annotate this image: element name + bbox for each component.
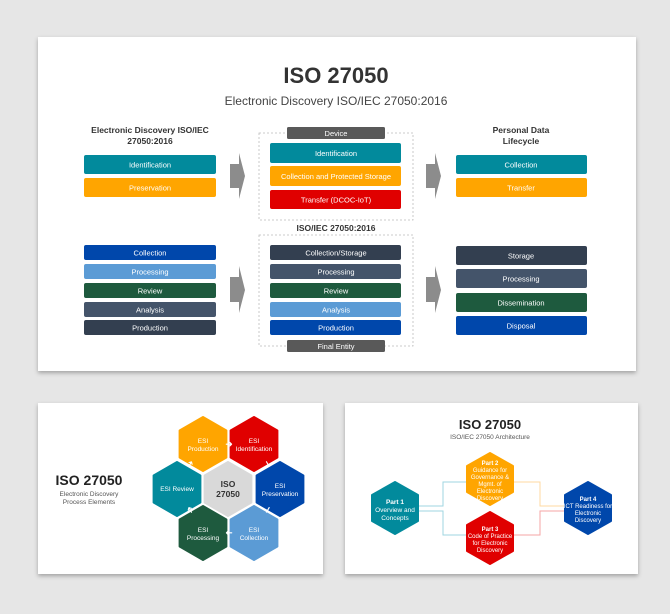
center top dashed group: Transfer (DCOC-IoT) bbox=[301, 196, 372, 204]
cycle arrows: ➜ bbox=[262, 504, 274, 516]
left bottom boxes: Processing bbox=[131, 268, 169, 276]
right bottom boxes: Dissemination bbox=[497, 298, 545, 308]
cycle arrows: ➜ bbox=[262, 458, 274, 470]
hexagon: part 2: Governance & bbox=[471, 475, 509, 481]
hexagon: part 3 bbox=[467, 512, 513, 564]
left bottom boxes: Analysis bbox=[136, 306, 164, 314]
connectors bbox=[418, 482, 566, 535]
left top boxes bbox=[84, 155, 216, 197]
heading: ISO 27050 bbox=[56, 472, 123, 488]
hexagon: part 2 bbox=[467, 453, 513, 505]
hexagon cluster: ISO bbox=[221, 479, 236, 489]
hexagon: part 1: Part 1 bbox=[386, 499, 404, 506]
section heading: ISO/IEC 27050:2016 bbox=[297, 223, 376, 233]
hexagon: part 3: Code of Practice bbox=[468, 534, 513, 540]
hexagon: part 3: for Electronic bbox=[472, 541, 508, 547]
title: ISO 27050 bbox=[283, 63, 389, 88]
right bottom boxes bbox=[456, 246, 587, 335]
hexagon cluster: Processing bbox=[187, 535, 219, 542]
left top boxes: Identification bbox=[129, 160, 171, 170]
subtitle: Electronic Discovery bbox=[60, 491, 119, 498]
center top dashed group: Device bbox=[325, 129, 347, 138]
hexagon: part 3: Discovery bbox=[477, 548, 503, 554]
center bottom dashed group: Collection/Storage bbox=[305, 248, 367, 258]
left heading: 27050:2016 bbox=[127, 136, 173, 146]
center top dashed group: Identification bbox=[315, 149, 357, 158]
center bottom dashed group: Processing bbox=[317, 268, 355, 276]
center bottom dashed group: Analysis bbox=[322, 306, 350, 314]
hexagon cluster: 27050 bbox=[216, 489, 240, 499]
arrow top left bbox=[230, 153, 245, 199]
arrow bottom left bbox=[230, 266, 245, 313]
right heading: Lifecycle bbox=[503, 136, 539, 146]
hexagon: part 1 bbox=[372, 482, 418, 534]
hexagon: part 2: Mgmt. of bbox=[478, 482, 502, 488]
center bottom dashed group bbox=[259, 235, 413, 352]
hexagon: part 4: Part 4 bbox=[580, 497, 597, 503]
left bottom boxes: Review bbox=[138, 286, 163, 296]
hexagon: part 4: ICT Readiness for bbox=[564, 504, 612, 510]
hexagon: part 4: Discovery bbox=[575, 518, 601, 524]
hexagon: part 1: Concepts bbox=[381, 515, 409, 522]
heading: ISO 27050 bbox=[459, 417, 521, 432]
right bottom boxes: Disposal bbox=[507, 322, 536, 330]
left bottom boxes: Collection bbox=[134, 248, 166, 258]
subtitle: ISO/IEC 27050 Architecture bbox=[450, 434, 530, 441]
panel: bottom left slide bbox=[38, 403, 323, 574]
center top dashed group: Collection and Protected Storage bbox=[281, 172, 391, 181]
hexagon cluster: ESI bbox=[275, 483, 285, 490]
hexagon cluster bbox=[154, 417, 303, 560]
left heading: Electronic Discovery ISO/IEC bbox=[91, 125, 209, 135]
hexagon: part 2: Discovery bbox=[477, 496, 503, 502]
cycle arrows: ➜ bbox=[184, 458, 196, 470]
hexagon cluster: ESI bbox=[249, 438, 259, 445]
arrow bottom right bbox=[426, 266, 441, 313]
right top boxes: Collection bbox=[505, 160, 537, 170]
center top dashed group bbox=[259, 127, 413, 220]
right bottom boxes: Processing bbox=[502, 274, 540, 284]
left bottom boxes: Production bbox=[132, 324, 168, 332]
right heading: Personal Data bbox=[493, 125, 550, 135]
cycle arrows: ➜ bbox=[184, 504, 196, 516]
left bottom boxes bbox=[84, 245, 216, 335]
center bottom dashed group: Final Entity bbox=[317, 342, 355, 351]
subtitle: Electronic Discovery ISO/IEC 27050:2016 bbox=[225, 94, 448, 108]
hexagon: part 1: Overview and bbox=[375, 507, 415, 514]
center bottom dashed group: Review bbox=[324, 286, 349, 296]
hexagon cluster: ESI bbox=[198, 527, 208, 534]
panel: top slide bbox=[38, 37, 636, 371]
hexagon cluster: Collection bbox=[240, 535, 269, 542]
cycle arrows bbox=[184, 439, 274, 538]
hexagon cluster: ESI bbox=[198, 438, 208, 445]
hexagon: part 2: Guidance for bbox=[473, 468, 507, 474]
right top boxes: Transfer bbox=[507, 184, 535, 192]
hexagon cluster: Identification bbox=[236, 446, 273, 453]
hexagon: part 2: Electronic bbox=[477, 489, 503, 495]
hexagon cluster: Preservation bbox=[262, 491, 299, 498]
hexagon: part 2: Part 2 bbox=[482, 461, 499, 467]
hexagon cluster: ESI Review bbox=[160, 486, 194, 493]
cycle arrows: ➜ bbox=[225, 439, 233, 449]
hexagon: part 4: Electronic bbox=[575, 511, 601, 517]
right bottom boxes: Storage bbox=[508, 252, 534, 260]
left top boxes: Preservation bbox=[129, 184, 171, 192]
center bottom dashed group: Production bbox=[318, 324, 354, 332]
hexagon: part 3: Part 3 bbox=[482, 527, 499, 533]
hexagon cluster: Production bbox=[187, 446, 219, 453]
hexagon: part 4 bbox=[564, 482, 612, 534]
hexagon cluster: ESI bbox=[249, 527, 259, 534]
cycle arrows: ➜ bbox=[225, 528, 233, 538]
panel: bottom right slide bbox=[345, 403, 638, 574]
subtitle: Process Elements bbox=[63, 499, 116, 506]
arrow top right bbox=[426, 153, 441, 199]
right top boxes bbox=[456, 155, 587, 197]
